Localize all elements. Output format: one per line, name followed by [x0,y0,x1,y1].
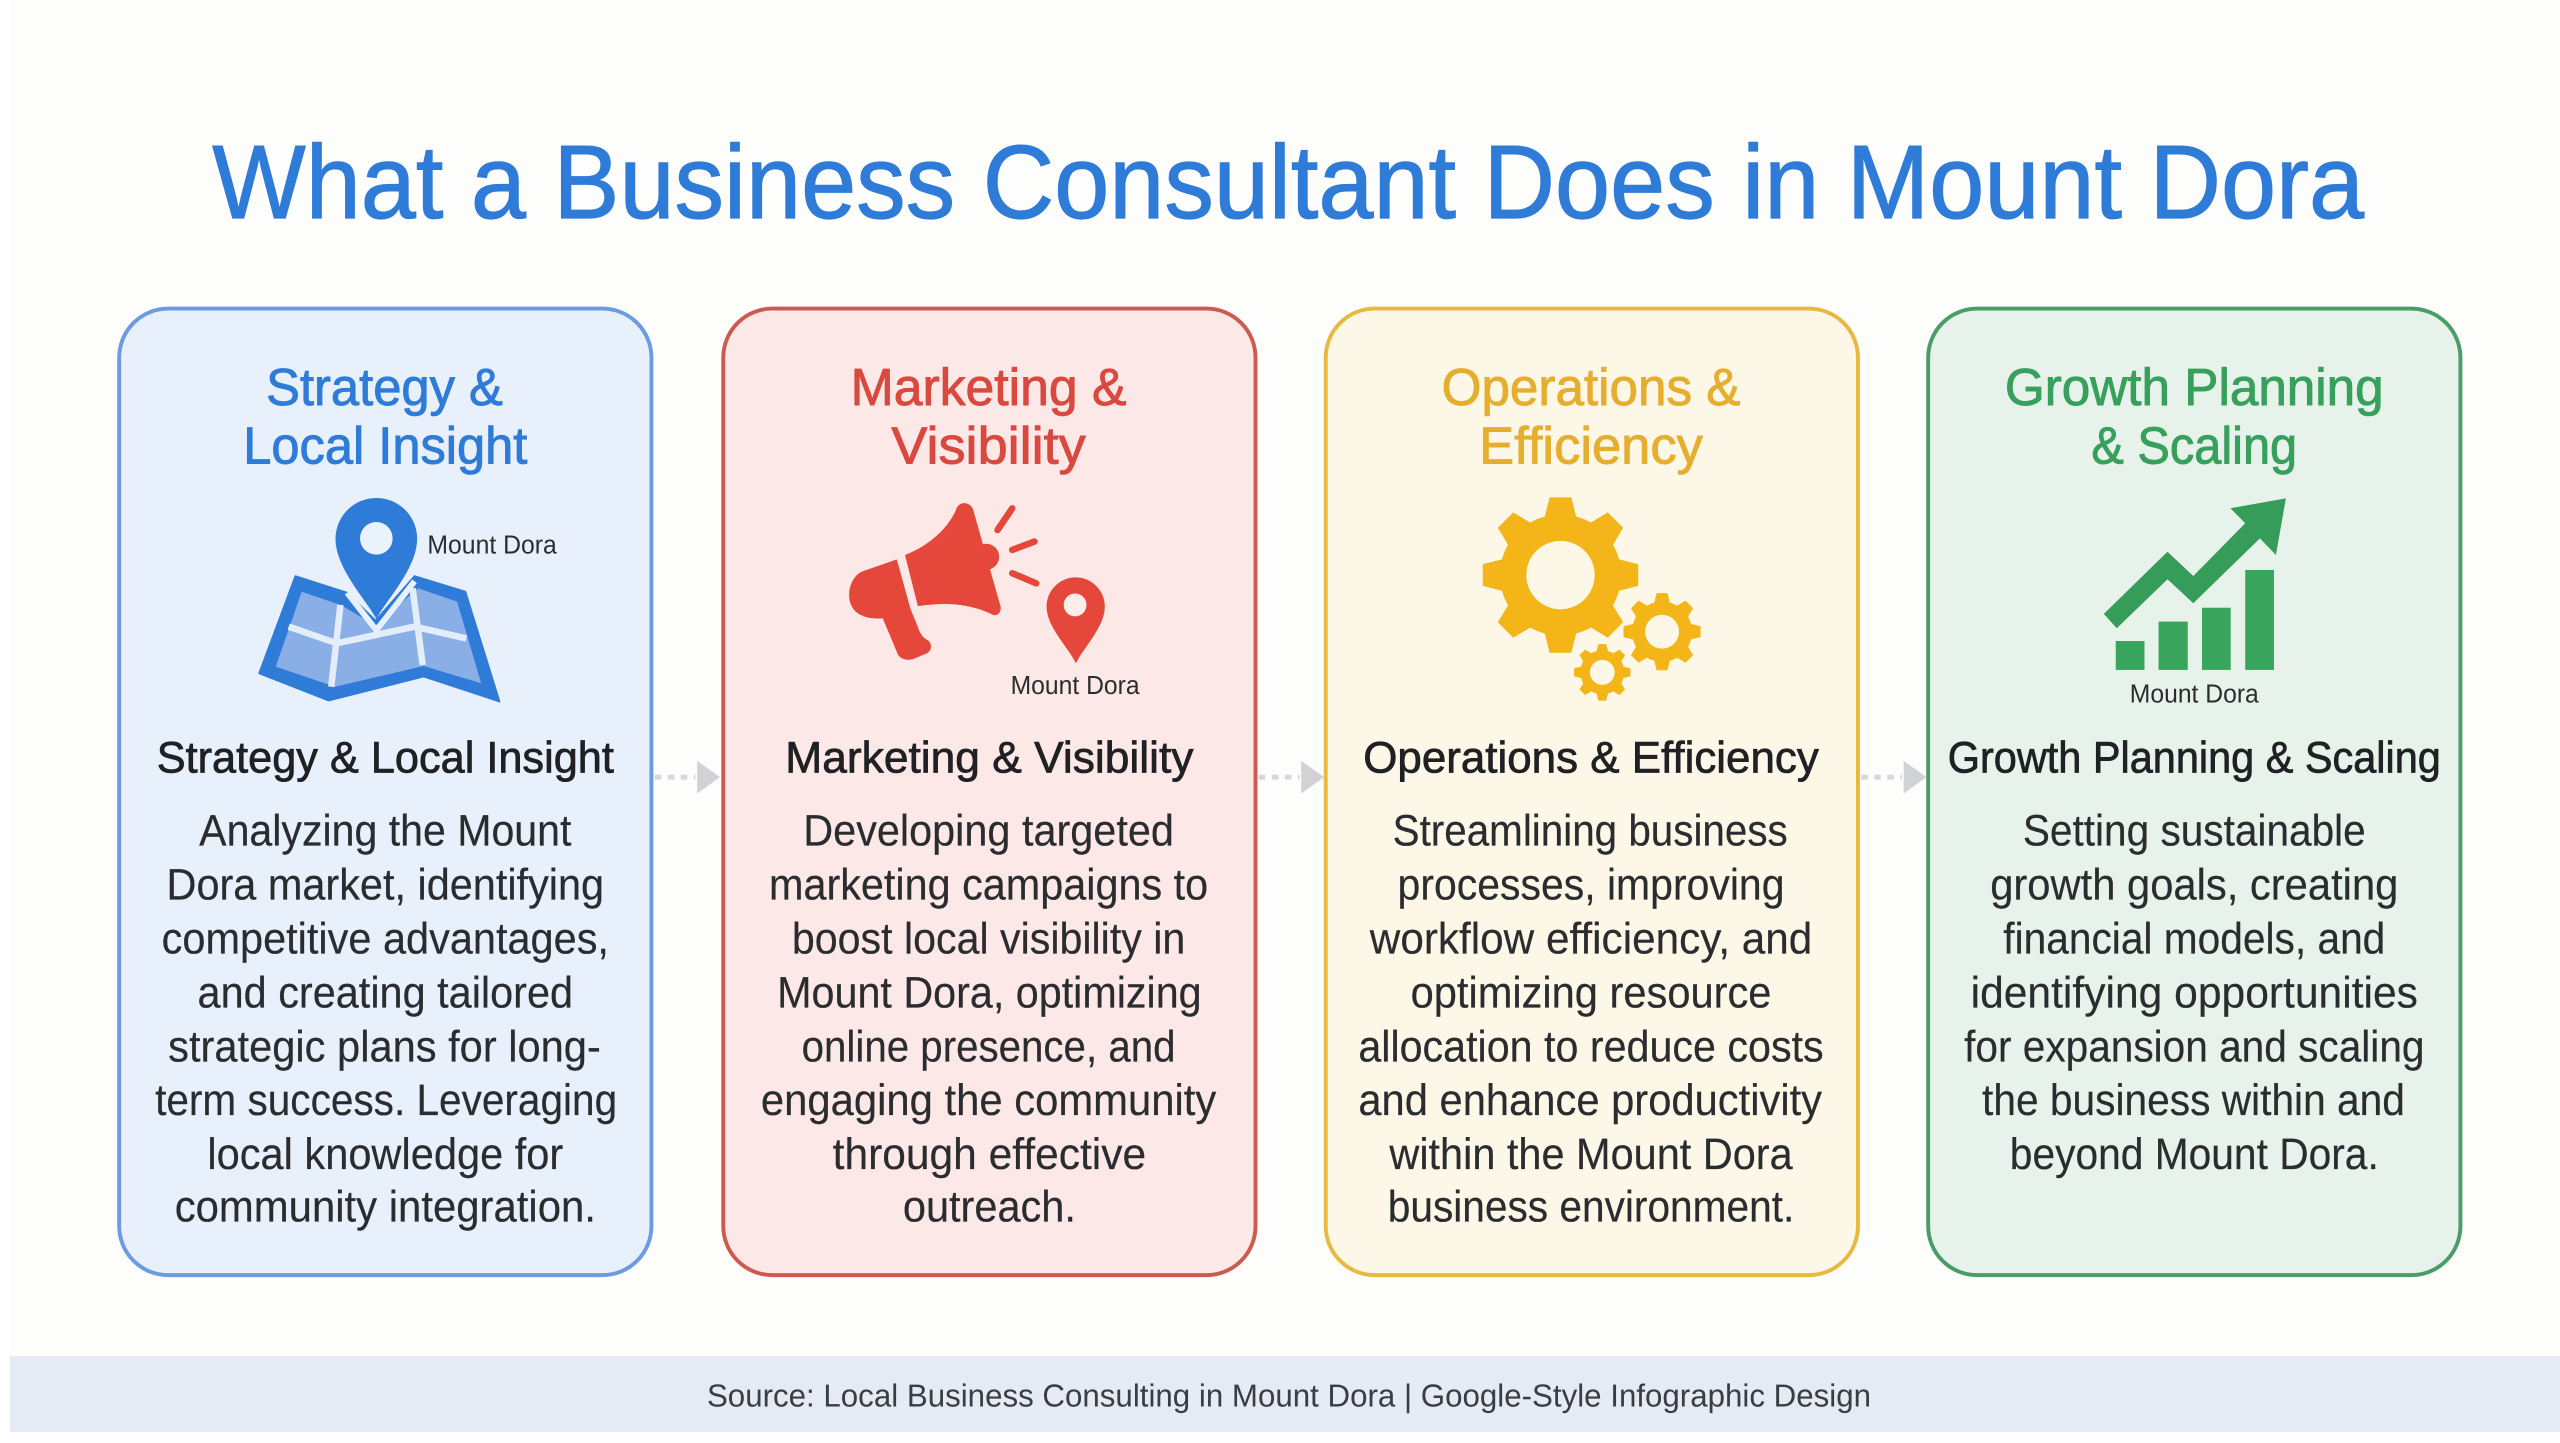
text block: marketing description: engaging the community [761,1076,1217,1125]
heading: operations: Efficiency [1479,416,1703,475]
text block: strategy description: community integration. [175,1182,596,1231]
text block: growth description [1964,807,2424,1179]
heading: operations [1442,358,1740,475]
heading: strategy [243,358,528,475]
text block: operations description: allocation to reduce costs [1358,1022,1824,1071]
panel: growth planning and scaling [1928,309,2460,1275]
text block: operations description: workflow efficiency, and [1368,914,1812,963]
title: What a Business Consultant Does in Mount Dora [212,123,2365,241]
text block: operations description: processes, improving [1398,860,1784,909]
text block: strategy description: term success. Leveraging [155,1076,617,1125]
text block: growth description: beyond Mount Dora. [2010,1130,2379,1179]
heading: marketing: Visibility [891,416,1086,475]
text block: marketing description: Mount Dora, optimizing [777,968,1202,1017]
heading: strategy: Local Insight [243,416,528,475]
text block: growth description: for expansion and scaling [1964,1022,2424,1071]
text block: growth description: Setting sustainable [2023,807,2366,856]
heading: strategy: Strategy & [266,358,503,416]
source text: Source: Local Business Consulting in Mount Dora | Google-Style Infographic Design [707,1379,1871,1415]
subheading: strategy: Strategy & Local Insight [157,733,615,782]
text block: operations description: optimizing resource [1411,968,1771,1017]
label: mount dora: Mount Dora [2130,682,2259,709]
icon: map with location pin [259,498,500,702]
subheading: operations: Operations & Efficiency [1363,733,1820,782]
text block: marketing description: outreach. [903,1182,1076,1231]
text block: marketing description [761,807,1217,1231]
subheading: growth: Growth Planning & Scaling [1948,733,2441,782]
text block: marketing description: online presence, and [802,1022,1176,1071]
panel: marketing and visibility [723,309,1256,1275]
text block: marketing description: boost local visibility in [792,914,1185,963]
text block: operations description: Streamlining business [1393,807,1788,856]
text block: marketing description: Developing targeted [803,807,1174,856]
label: mount dora: Mount Dora [427,532,557,560]
text block: growth description: identifying opportunities [1971,968,2418,1017]
text block: strategy description: strategic plans for long- [168,1022,601,1071]
heading: growth [2005,358,2384,475]
text block: strategy description: competitive advantages, [162,914,609,963]
text block: operations description: business environment. [1388,1182,1794,1231]
text block: strategy description: and creating tailored [198,968,573,1017]
heading: operations: Operations & [1442,358,1740,416]
footer source bar [10,1356,2560,1432]
arrow: marketing to operations [1259,761,1324,794]
text block: strategy description: local knowledge for [207,1130,563,1179]
text block: growth description: growth goals, creating [1990,860,2398,909]
text block: growth description: the business within and [1982,1076,2405,1125]
text block: strategy description [155,807,617,1231]
text block: operations description [1358,807,1824,1231]
text block: strategy description: Analyzing the Mount [199,807,572,856]
icon: location pin [1047,577,1105,663]
arrow: strategy to marketing [655,761,720,794]
text block: marketing description: through effective [833,1130,1146,1179]
arrow: operations to growth [1861,761,1927,794]
text block: operations description: within the Mount Dora [1388,1130,1794,1179]
icon: gears [1483,497,1701,701]
label: mount dora: Mount Dora [1011,673,1140,700]
text block: marketing description: marketing campaigns to [769,860,1208,909]
subheading: marketing: Marketing & Visibility [785,733,1194,782]
panel: strategy and local insight [119,309,651,1275]
heading: growth: & Scaling [2091,416,2297,475]
text block: operations description: and enhance productivity [1358,1076,1823,1125]
icon: megaphone [849,503,1036,660]
text block: strategy description: Dora market, identifying [167,860,604,909]
heading: marketing [851,358,1127,475]
heading: marketing: Marketing & [851,358,1127,416]
heading: growth: Growth Planning [2005,358,2384,416]
icon: growth chart with arrow [2104,498,2286,670]
text block: growth description: financial models, and [2003,914,2385,963]
panel: operations and efficiency [1326,309,1858,1275]
